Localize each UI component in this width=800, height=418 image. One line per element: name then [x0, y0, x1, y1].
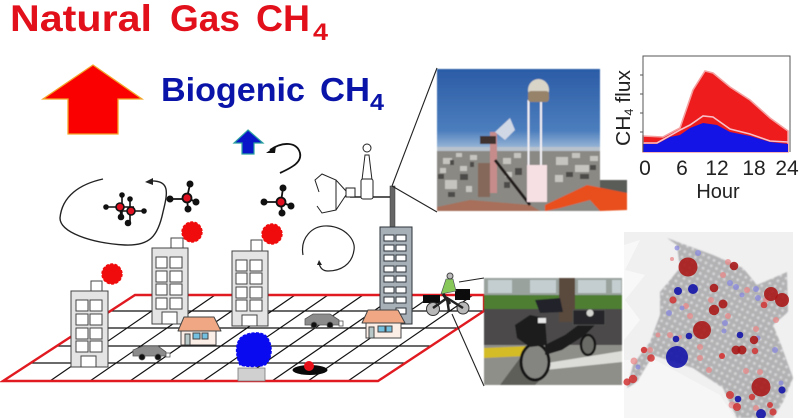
chart y axis label: CH	[613, 117, 635, 146]
building: middle left	[152, 238, 188, 324]
smoke: middle right building	[262, 224, 282, 244]
chart: diurnal CH4 flux	[613, 56, 799, 203]
smoke: left building	[102, 264, 122, 284]
map markers: blue sites	[666, 284, 786, 418]
chart frame	[640, 56, 790, 152]
chart area: blue biogenic flux	[643, 123, 788, 152]
chart y axis label: 4	[622, 108, 636, 116]
chart y axis label: flux	[613, 70, 635, 109]
chart tick labels	[639, 157, 799, 180]
chart tick labels: 0	[639, 157, 651, 180]
car: left	[133, 346, 170, 360]
photo: bicycle with instruments	[484, 278, 622, 385]
photo: rooftop instruments	[437, 69, 627, 211]
arrow: large looping wind arrow	[60, 178, 166, 245]
heading: Biogenic CH4	[161, 71, 384, 115]
smoke: middle left building	[182, 222, 202, 242]
chart x axis label: Hour	[696, 181, 740, 203]
chart tick labels: 6	[676, 157, 688, 180]
icon: small blue up arrow	[234, 130, 263, 154]
callout lines: bicycle photo	[452, 278, 484, 386]
building: left	[71, 281, 108, 367]
icon: methane molecules	[104, 181, 294, 226]
map markers: red sites	[678, 258, 789, 396]
arrow: looping wind arrow near tower	[303, 226, 354, 271]
chart tick labels: 12	[705, 157, 729, 180]
molecule: centre	[167, 181, 199, 212]
callout lines: tower photo	[392, 68, 437, 212]
icon: eddy covariance sensor	[315, 144, 390, 213]
map markers: light blue sites	[636, 246, 784, 386]
icon: large red up arrow	[43, 65, 142, 134]
map: spatial methane emissions	[623, 232, 793, 418]
title: Natural Gas CH4	[10, 0, 329, 46]
heading: Biogenic CH4: CH	[320, 71, 370, 108]
molecule: left pair A	[104, 193, 134, 220]
map markers: medium red sites	[623, 296, 777, 416]
molecule: right	[261, 185, 294, 216]
arrow: curved arrow to biogenic	[266, 144, 300, 173]
ground grid	[3, 295, 484, 381]
title: Natural Gas CH4: 4	[313, 19, 329, 46]
icon: natural gas leak	[292, 361, 328, 375]
heading: Biogenic CH4: Biogenic	[161, 71, 305, 108]
building: grey tower	[380, 227, 412, 324]
map markers: light red sites	[630, 257, 779, 411]
building: middle right	[232, 240, 268, 326]
molecule: left pair B	[120, 197, 146, 226]
mast on tower	[390, 186, 395, 228]
heading: Biogenic CH4: 4	[370, 89, 384, 115]
icon: biogenic source with blue cloud	[237, 333, 271, 381]
icon: cyclist with instruments	[423, 273, 470, 316]
house: left	[178, 317, 221, 345]
chart tick labels: 18	[742, 157, 766, 180]
house: right	[362, 310, 405, 338]
chart tick labels: 24	[775, 157, 799, 180]
chart line: biogenic upper bound	[643, 116, 788, 143]
car: right	[305, 314, 343, 328]
chart area: red natural gas flux	[643, 71, 788, 152]
